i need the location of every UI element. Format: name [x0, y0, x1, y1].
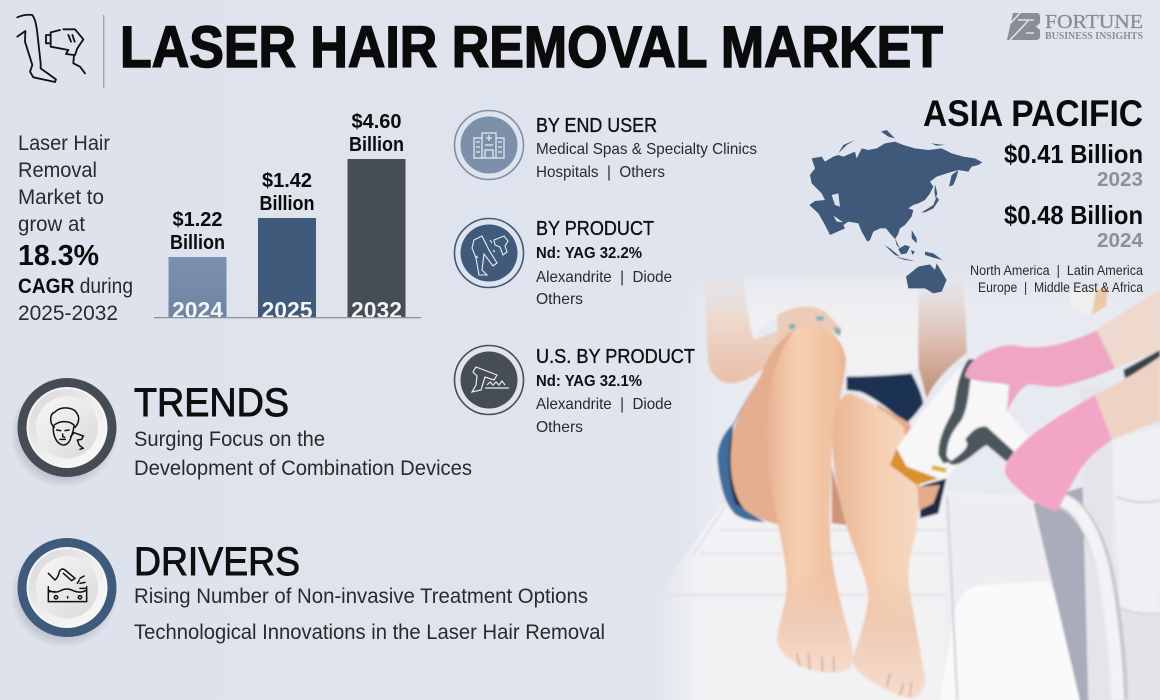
other regions: North America | Latin America — [970, 263, 1143, 278]
logo wordmark: FORTUNE — [1045, 11, 1143, 33]
drivers panel — [10, 538, 605, 648]
heading and text — [536, 115, 757, 181]
heading and text: U.S. BY PRODUCT — [536, 346, 695, 368]
CAGR text block: Removal — [18, 159, 97, 182]
heading and text: Alexandrite | Diode — [536, 269, 672, 286]
lower arm of practitioner — [1095, 357, 1160, 440]
bar 2024: 2024 — [172, 297, 223, 323]
bar 2032 — [348, 111, 406, 323]
front shin and foot — [767, 323, 853, 673]
value 2024: $0.48 Billion — [1004, 200, 1143, 230]
heading and text — [536, 218, 672, 308]
logo: Fortune Business Insights — [1006, 11, 1143, 42]
segment: by end user — [454, 110, 757, 181]
background equipment — [1070, 283, 1108, 315]
icon: face treatment — [10, 378, 118, 488]
heading and text: Hospitals | Others — [536, 164, 665, 181]
other regions — [970, 263, 1143, 295]
bar 2024: Billion — [170, 232, 225, 254]
hand on knee — [777, 306, 842, 345]
map: Asia Pacific — [809, 130, 982, 293]
denim shorts — [717, 423, 765, 522]
other regions: Europe | Middle East & Africa — [978, 280, 1143, 295]
description — [134, 428, 472, 480]
heading and text: Medical Spas & Specialty Clinics — [536, 141, 757, 158]
bar 2025: Billion — [260, 193, 314, 215]
description: Technological Innovations in the Laser Hair Removal — [134, 621, 605, 644]
heading: DRIVERS — [134, 540, 300, 584]
CAGR text block: 18.3% — [18, 240, 99, 272]
CAGR text block — [18, 132, 133, 325]
treatment bed — [657, 492, 1083, 700]
header icon: leg and laser device — [17, 15, 85, 82]
CAGR text block: Market to — [18, 186, 104, 209]
right arm — [918, 280, 967, 398]
bar 2025 — [258, 170, 316, 323]
crossed shin and foot — [833, 393, 925, 698]
dark shorts — [847, 373, 923, 423]
upper pink glove — [965, 330, 1115, 412]
icon: hospital — [454, 110, 524, 180]
CAGR text block: 2025-2032 — [18, 302, 118, 325]
heading and text: Others — [536, 291, 583, 308]
left arm — [705, 277, 790, 383]
value 2023: 2023 — [1097, 169, 1143, 191]
floor shadow — [1033, 487, 1110, 700]
machine body — [1112, 427, 1160, 700]
heading and text: Nd: YAG 32.1% — [536, 373, 642, 390]
description: Surging Focus on the — [134, 428, 325, 451]
icon: laser on skin — [454, 346, 524, 414]
heading and text: Alexandrite | Diode — [536, 396, 672, 413]
handpiece cable — [1055, 500, 1120, 700]
logo: Fortune Business Insights: BUSINESS INSIGHTS — [1045, 31, 1143, 42]
front thigh — [731, 323, 800, 525]
heading and text: BY END USER — [536, 115, 657, 137]
value 2023 — [1004, 139, 1143, 191]
heading and text — [536, 346, 695, 436]
heading and text: Others — [536, 419, 583, 436]
bar 2024 — [168, 209, 226, 323]
bar 2032: $4.60 — [352, 111, 402, 133]
lower pink glove — [1005, 395, 1112, 512]
nail polish — [789, 316, 841, 335]
region heading: ASIA PACIFIC — [923, 93, 1143, 134]
title: LASER HAIR REMOVAL MARKET — [120, 15, 943, 80]
heading and text: BY PRODUCT — [536, 218, 654, 240]
photo backdrop — [697, 290, 1160, 570]
handpiece — [894, 356, 1028, 486]
bar 2032: 2032 — [351, 297, 402, 323]
trends panel — [10, 378, 472, 488]
bar 2032: Billion — [349, 134, 404, 156]
bar 2025: 2025 — [262, 297, 313, 323]
photo: leg laser hair removal treatment — [657, 277, 1160, 700]
icon: skin and laser — [10, 538, 118, 648]
description — [134, 585, 605, 644]
segment: U.S. by product — [454, 346, 695, 436]
description: Development of Combination Devices — [134, 457, 472, 480]
CAGR text block: Laser Hair — [18, 132, 110, 155]
icon: legs and laser — [454, 218, 524, 288]
bar chart — [154, 111, 421, 323]
rear thigh — [877, 403, 940, 510]
regional data — [923, 93, 1144, 295]
shirt — [743, 278, 918, 375]
header divider — [103, 15, 104, 88]
description: Rising Number of Non-invasive Treatment Options — [134, 585, 588, 608]
upper arm of practitioner — [1097, 290, 1160, 368]
heading: TRENDS — [134, 381, 289, 425]
machine column — [1080, 387, 1113, 700]
heading and text: Nd: YAG 32.2% — [536, 245, 642, 262]
bed bolster — [945, 495, 1052, 700]
value 2023: $0.41 Billion — [1004, 139, 1143, 169]
value 2024: 2024 — [1097, 230, 1144, 252]
CAGR text block: grow at — [18, 213, 85, 236]
segment: by product — [454, 218, 672, 308]
CAGR text block: CAGR during — [18, 275, 133, 298]
value 2024 — [1004, 200, 1144, 252]
logo mark — [1006, 13, 1040, 40]
bar 2024: $1.22 — [172, 209, 222, 231]
bar 2025: $1.42 — [262, 170, 312, 192]
